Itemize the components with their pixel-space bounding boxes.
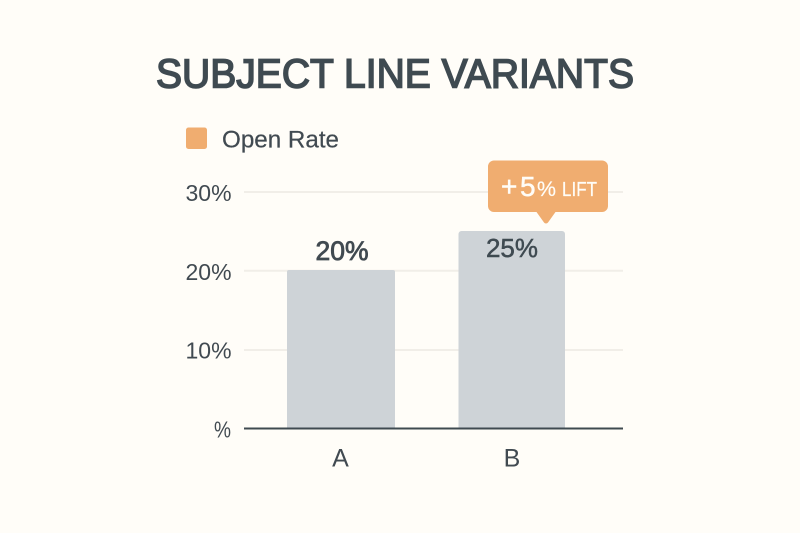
x axis <box>244 428 623 430</box>
y axis labels: 30% <box>186 180 232 206</box>
y axis labels: 10% <box>186 338 232 364</box>
x axis labels: B <box>504 444 520 472</box>
x axis labels: A <box>332 444 349 472</box>
bar B: 25% <box>486 233 538 263</box>
legend: open rate: Open Rate <box>222 126 339 154</box>
x axis labels <box>332 444 520 472</box>
y axis labels: 20% <box>186 259 232 285</box>
bar A <box>287 236 395 428</box>
callout: +5% lift: LIFT <box>562 179 597 201</box>
y axis labels <box>186 180 232 442</box>
callout: +5% lift: 5 <box>520 171 536 202</box>
bar A: 20% <box>315 236 369 266</box>
callout: +5% lift: % <box>537 178 556 201</box>
callout: +5% lift: + <box>501 171 517 202</box>
bar B <box>458 231 565 428</box>
callout: +5% lift <box>488 160 608 223</box>
title: SUBJECT LINE VARIANTS <box>156 50 634 96</box>
y axis labels: % <box>214 416 231 442</box>
